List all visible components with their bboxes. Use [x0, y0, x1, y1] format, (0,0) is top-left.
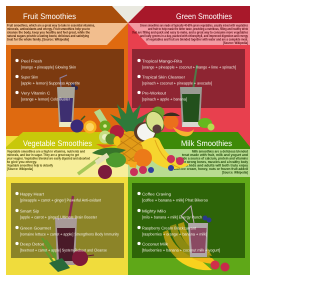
avocado [143, 108, 167, 136]
green recipe list: [spinach + apple + banana] [142, 96, 187, 102]
icon: green smoothie glass [180, 65, 202, 127]
green description band [128, 23, 250, 45]
raspberries [130, 168, 138, 176]
bananas below box [176, 258, 214, 270]
vegetable recipe list: Happy Heart [20, 192, 45, 196]
fruit recipe list: Peel Fresh [21, 58, 42, 64]
fruit description text: natural sugars provide a lasting boost, delicious and satisfying [7, 34, 89, 38]
fruit recipe list: [mango + pineapple] Glowing Skin [21, 64, 76, 70]
milk description text: with ice cream, honey, nuts or frozen fruit added [173, 167, 248, 171]
green description text: [Source: Wikipedia] [223, 41, 248, 45]
lemon [114, 136, 120, 146]
orange [164, 114, 178, 130]
lime half [106, 134, 116, 144]
beetroot [98, 165, 112, 179]
milk description text: treat made with fruit, milk and yogurt and [182, 153, 248, 157]
fruit description text: minerals, antioxidants and energy. Fruit smoothies help you to [7, 27, 90, 31]
milk recipe list: Coconut Milk [142, 242, 168, 246]
kiwi [100, 120, 110, 132]
vegetable description text [7, 150, 90, 171]
vegetable recipe list: Smart Sip [20, 208, 40, 214]
vegetable recipe list box [11, 183, 124, 258]
vegetable heading: Vegetable Smoothies [23, 139, 92, 148]
mango piece [127, 161, 137, 168]
coconut [134, 122, 156, 142]
green description text [132, 24, 248, 45]
fruit header band [6, 6, 128, 23]
milk recipe list: [coffee + banana + milk] Phat Bikeroo [142, 198, 209, 202]
vegetable recipe list: Green Gourmet [20, 226, 52, 230]
fruit description text [7, 24, 95, 42]
milk recipe list: Raspberry Cream Blackcurrant [142, 226, 197, 230]
orange slice [84, 120, 96, 134]
pear [99, 130, 111, 144]
milk description text: Milk smoothies are a delicious blended [192, 150, 248, 154]
green recipe list box [132, 49, 245, 108]
fruit description text: cleanse the body, keep you healthy and feel great, while the [7, 30, 90, 34]
green recipe list: [orange + pineapple + coconut + mango + lime + spinach] [142, 64, 236, 70]
vegetable recipe list: [apple + carrot + ginger] Ultimate Brain Booster [20, 214, 98, 220]
mango slices [173, 127, 194, 136]
large banana [141, 137, 190, 169]
milk recipe list box [132, 183, 245, 258]
pineapple leaves [110, 100, 148, 134]
green recipe list: Pre-Workout [142, 90, 167, 96]
fruit description text: Fruit smoothies, which are a great way to take in essential vitamins, [7, 24, 95, 28]
carrot [96, 144, 117, 148]
green recipe list: [spinach + coconut + pineapple + avocado] [142, 80, 212, 86]
milk recipe list: [milo + banana + milk] Energy Punch [142, 214, 202, 220]
milk description text [173, 150, 248, 174]
milk heading: Milk Smoothies [181, 139, 232, 148]
red apple [110, 125, 124, 139]
milk recipe list [137, 192, 220, 252]
vegetable recipe list: [romaine lettuce + carrot + apple] Strengthens Body Immunity [20, 232, 119, 236]
leek [94, 109, 108, 125]
fruit recipe list: [apple + lemon] Suppress Appetite [21, 80, 81, 86]
milk recipe list: Coffee Craving [142, 192, 171, 196]
panel: fruit smoothies [6, 6, 128, 136]
vegetable recipe list: [pineapple + carrot + ginger] Powerful Anti-oxidant [20, 198, 102, 202]
vegetable description band [6, 149, 128, 177]
milk description text: [Source: Wikipedia] [222, 170, 248, 174]
vegetable description text: minerals, and low in sugar. They are a great way to get [7, 153, 80, 157]
milk header band [128, 132, 250, 149]
green leaves [92, 148, 126, 155]
vegetable description text: to give you energy. [7, 160, 37, 164]
fruit recipe list [15, 58, 81, 102]
vegetable recipe list: [beetroot + carrot + apple] System Reboot and Cleanse [20, 248, 108, 252]
vegetable description text: Vegetable smoothies help to detoxify [7, 164, 53, 168]
milk recipe list: Mighty Milo [142, 208, 167, 214]
vegetable description text: [Source: Wikipedia] [7, 167, 33, 171]
illustration: central fruit pile [70, 100, 214, 179]
bananas seen through box [163, 222, 212, 258]
green header band [128, 6, 250, 23]
green heading: Green Smoothies [176, 12, 232, 21]
green recipe list: Tropical Mango-Rita [142, 58, 183, 64]
celery [78, 158, 100, 174]
icon: purple fruit smoothie glass [57, 75, 78, 127]
vegetable description text: Vegetable smoothies are a high in vitamins, nutrients and [7, 150, 85, 154]
panel: green smoothies [128, 6, 250, 136]
pineapple [117, 131, 145, 165]
plum [70, 120, 84, 132]
blueberries [148, 167, 154, 173]
vegetable description text: your veggies. Vegetables blended are easily digested and absorbed [7, 156, 90, 160]
fruit heading: Fruit Smoothies [23, 12, 76, 21]
fruit description band [6, 23, 128, 45]
panel: milk smoothies [128, 132, 250, 275]
pineapple pattern [118, 134, 145, 162]
vegetable header band [6, 132, 128, 149]
green apple [152, 106, 164, 120]
icon: milk smoothie glass with bananas and berries [163, 206, 230, 272]
fruit description text: treat for the whole family. [Source: Wikipedia] [7, 38, 69, 42]
milk description text: that kids and adults will both truly enjoy [182, 164, 248, 168]
milk recipe list: [blueberries + banana + coconut milk + yogurt] [142, 248, 220, 252]
milk description text: provide a source of calcium, protein and vitamins [176, 156, 248, 160]
icon: vegetable smoothie glass with beetroot [42, 196, 94, 272]
green recipe list: Tropical Skin Cleanser [142, 74, 186, 80]
vegetable recipe list [15, 192, 119, 252]
vegetable recipe list: Deep Detox [20, 242, 44, 246]
panel: vegetable smoothies [6, 132, 128, 275]
lime [198, 118, 212, 128]
milk recipe list: [raspberries + orange + banana + milk] [142, 232, 207, 236]
fruit recipe list: Very Vitamin C [21, 90, 50, 96]
green recipe list [137, 58, 236, 102]
milk description band [128, 149, 250, 177]
fruit recipe list box [11, 49, 124, 108]
fruit recipe list: [orange + lemon] Cold Buster [21, 96, 71, 102]
milk corner wedge [238, 132, 250, 147]
fruit recipe list: Super Slim [21, 74, 39, 80]
orange centre [134, 149, 152, 167]
top centre grey notch [112, 6, 145, 23]
